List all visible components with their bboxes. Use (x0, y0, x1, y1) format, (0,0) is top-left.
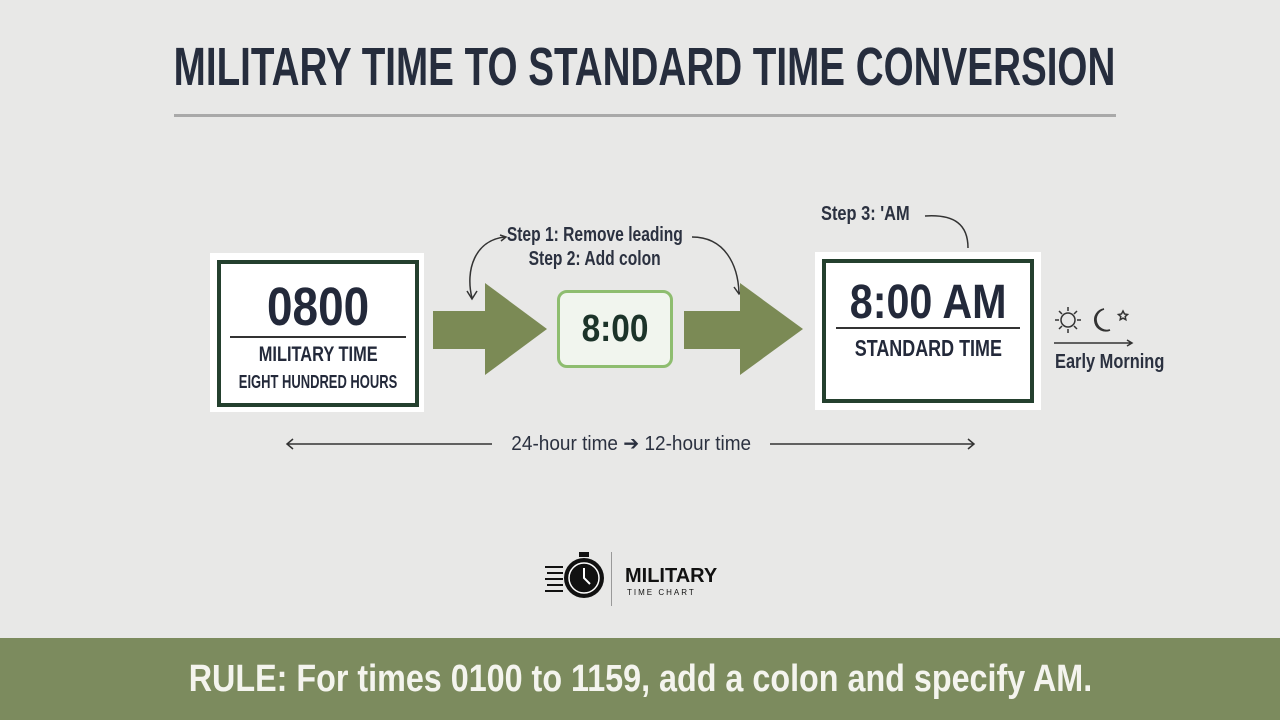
arrow 2 (684, 283, 803, 375)
step 1 and 2 labels: Step 1: Remove leading (507, 224, 683, 246)
arrow 1 (433, 283, 547, 375)
intermediate box 8:00 (557, 290, 673, 368)
step 1 and 2 labels: Step 2: Add colon (529, 248, 661, 270)
timeline arrow: 24-hour time ➔ 12-hour time (511, 433, 751, 455)
label: STANDARD TIME (854, 335, 1002, 361)
step 1 and 2 labels (507, 224, 683, 270)
label: MILITARY TIME (259, 343, 377, 366)
logo (545, 552, 717, 606)
logo: MILITARY (625, 565, 717, 587)
number 0800: 0800 (267, 277, 369, 337)
logo: TIME CHART (627, 588, 696, 597)
icon: sun moon star (1054, 307, 1134, 347)
curved arrows (466, 234, 740, 300)
rule banner (0, 638, 1280, 720)
panel: standard time (815, 252, 1041, 410)
step 3 label: Step 3: 'AM (821, 203, 910, 225)
title: MILITARY TIME TO STANDARD TIME CONVERSION (174, 37, 1116, 97)
8:00 AM: 8:00 AM (850, 276, 1006, 329)
intermediate box 8:00: 8:00 (582, 308, 648, 350)
early morning label: Early Morning (1055, 351, 1164, 373)
panel: military time (210, 253, 424, 412)
rule banner: RULE: For times 0100 to 1159, add a colon and specify AM. (188, 658, 1092, 700)
sublabel: EIGHT HUNDRED HOURS (239, 372, 397, 392)
timeline arrow (286, 433, 976, 455)
